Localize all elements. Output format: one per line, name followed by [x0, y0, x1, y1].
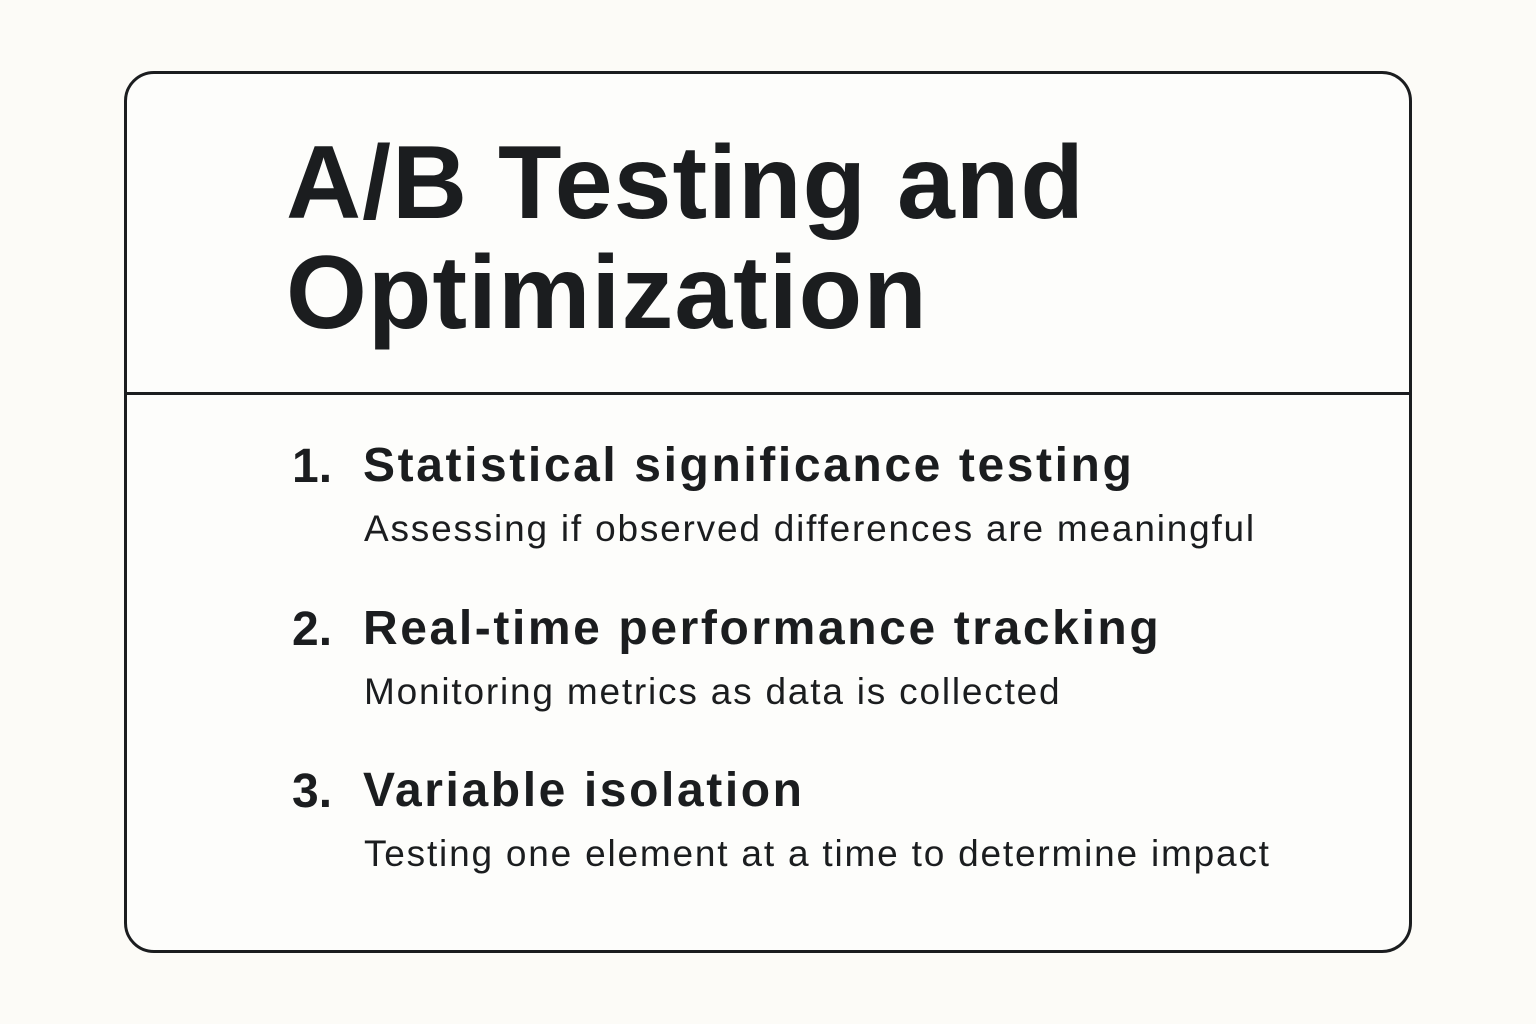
number 1: 1.: [292, 440, 332, 493]
number 3: 3.: [292, 765, 332, 818]
item 3: [292, 764, 1271, 874]
card panel: [124, 71, 1412, 953]
heading 1: Statistical significance testing: [363, 439, 1134, 492]
description 1: Assessing if observed differences are meaningful: [364, 508, 1256, 549]
heading 2: Real-time performance tracking: [363, 602, 1161, 655]
title: Optimization: [286, 235, 928, 351]
heading 3: Variable isolation: [363, 764, 805, 817]
number 2: 2.: [292, 603, 332, 656]
item 1: [292, 439, 1256, 549]
item 2: [292, 602, 1161, 712]
description 2: Monitoring metrics as data is collected: [364, 671, 1061, 712]
title: [286, 125, 1085, 351]
title: A/B Testing and: [286, 125, 1085, 241]
description 3: Testing one element at a time to determine impact: [364, 833, 1271, 874]
